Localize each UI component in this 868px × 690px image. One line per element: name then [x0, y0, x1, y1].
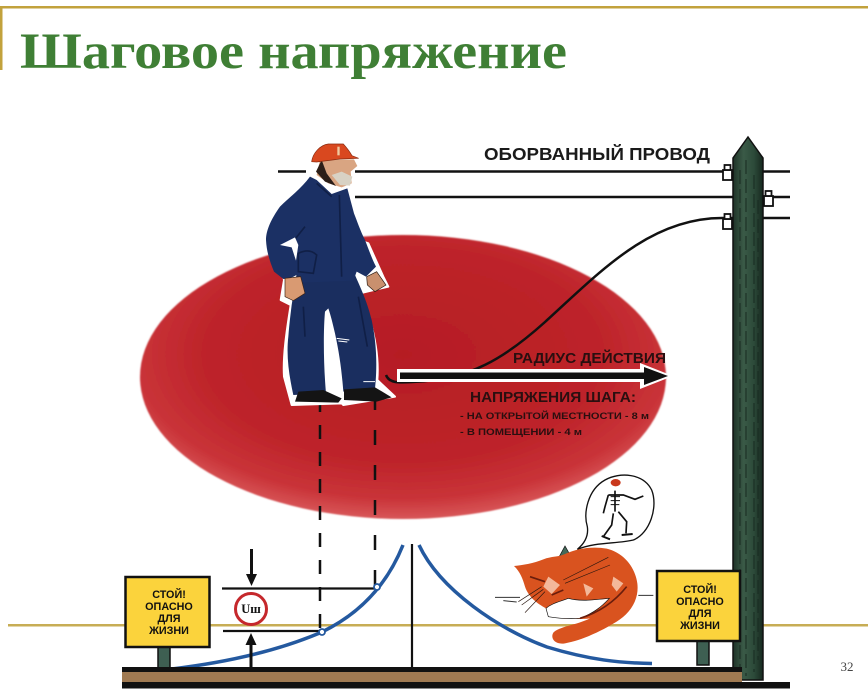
- step voltage graph: [172, 544, 652, 672]
- radius arrow: [397, 363, 673, 389]
- waist gap: [280, 237, 298, 261]
- right warning sign: [657, 571, 740, 665]
- danger zone ellipse: [140, 235, 666, 519]
- skeleton helmet: [611, 479, 621, 486]
- radius text: НАПРЯЖЕНИЯ ШАГА:: [470, 390, 636, 406]
- dashed projection lines: [320, 395, 375, 628]
- helmet: [312, 144, 359, 162]
- step voltage graph: Uш: [241, 602, 261, 616]
- hands: [285, 277, 305, 301]
- white cut-out outline: [280, 230, 395, 405]
- cat shadow fold: [530, 577, 627, 618]
- left warning sign: ДЛЯ: [157, 613, 181, 625]
- voltage curve: [172, 545, 403, 669]
- cat ground shadow: [495, 595, 653, 602]
- utility pole: [723, 137, 773, 680]
- thought bubble: [577, 475, 654, 549]
- fallen wire curve: [386, 218, 722, 382]
- voltage symbol: [236, 594, 266, 624]
- head: [317, 159, 357, 187]
- sleeping cat with thought bubble: [495, 475, 654, 644]
- page number: 32: [840, 659, 854, 674]
- cat body and head: [514, 548, 638, 644]
- jacket: [266, 177, 376, 283]
- right warning sign: ОПАСНО: [676, 596, 724, 608]
- trousers: [288, 273, 376, 395]
- cat ears: [558, 546, 571, 558]
- skeleton: [602, 491, 643, 539]
- radius text: - В ПОМЕЩЕНИИ - 4 м: [460, 427, 582, 437]
- boots: [295, 390, 342, 403]
- radius text: РАДИУС ДЕЙСТВИЯ: [513, 349, 666, 367]
- voltage arrows: [246, 549, 257, 586]
- radius text: [460, 349, 666, 437]
- radius text: - НА ОТКРЫТОЙ МЕСТНОСТИ - 8 м: [460, 410, 649, 421]
- worker figure: [266, 144, 395, 405]
- right warning sign: СТОЙ!: [683, 583, 717, 596]
- ground: [122, 667, 790, 688]
- label: broken wire: ОБОРВАННЫЙ ПРОВОД: [484, 143, 711, 164]
- left warning sign: ЖИЗНИ: [148, 625, 189, 637]
- insulators: [723, 165, 773, 229]
- white fur: [546, 598, 609, 619]
- left warning sign: [126, 577, 210, 668]
- left warning sign: ОПАСНО: [145, 601, 193, 613]
- overhead wires: [278, 172, 790, 218]
- right warning sign: ДЛЯ: [688, 608, 712, 620]
- right warning sign: ЖИЗНИ: [679, 620, 720, 632]
- title: Шаговое напряжение: [20, 24, 567, 80]
- shadow folds: [292, 183, 367, 347]
- whiskers: [518, 557, 610, 613]
- left warning sign: СТОЙ!: [152, 588, 186, 601]
